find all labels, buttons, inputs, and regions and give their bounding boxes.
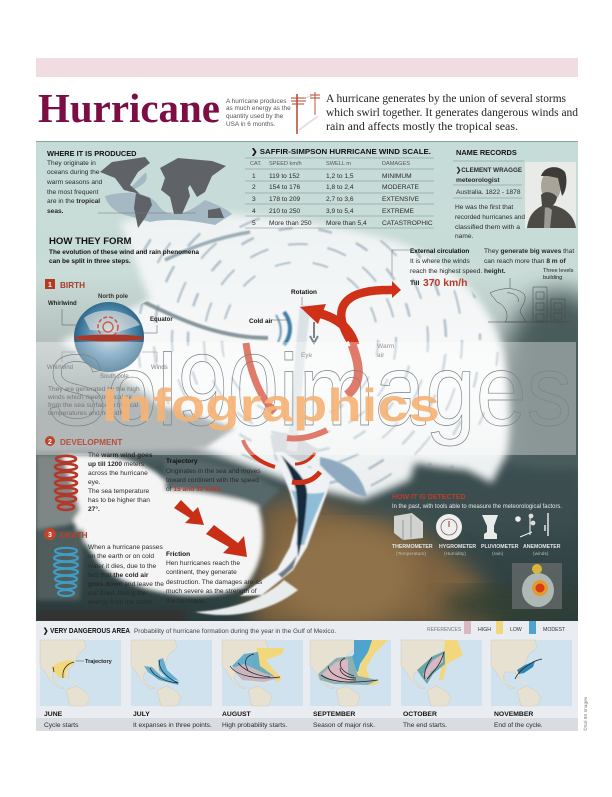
- instrument labels: (rain): [492, 551, 504, 557]
- how it is detected: In the past, with tools able to measure the meteorological factors.: [392, 503, 562, 510]
- month captions: It expanses in three points.: [133, 722, 212, 729]
- heading: where it is produced: WHERE IT IS PRODUCED: [47, 149, 137, 158]
- diagram labels: Warm: [377, 343, 395, 350]
- development text: [88, 452, 153, 513]
- name records: name.: [455, 233, 473, 240]
- step 2: development: 2: [48, 439, 52, 446]
- globe: [47, 294, 173, 380]
- friction text: Friction: [166, 551, 190, 558]
- diagram labels: Cold air: [249, 318, 273, 325]
- month captions: End of the cycle.: [494, 722, 543, 729]
- instrument labels: THERMOMETER: [392, 544, 433, 550]
- development text: up till 1200 meters: [88, 461, 145, 468]
- diagram labels: Rotation: [291, 289, 317, 296]
- big waves note: building: [543, 275, 562, 281]
- heading: where it is produced: They originate in: [47, 160, 96, 167]
- satellite image: [512, 563, 562, 609]
- side note: energy: USA in 6 months.: [226, 121, 276, 128]
- step 3: death: [44, 528, 88, 540]
- panel background: [36, 141, 578, 621]
- instrument labels: [392, 544, 561, 557]
- scale table: 1: [252, 173, 256, 180]
- map: July: [131, 640, 212, 706]
- trajectory text: Originates in the sea and moves: [166, 468, 261, 475]
- month captions: SEPTEMBER: [313, 711, 355, 718]
- trajectory text: Trajectory: [166, 458, 198, 465]
- scale table: CAT.: [250, 161, 262, 167]
- instrument labels: PLUVIOMETER: [481, 544, 519, 550]
- step 1: birth: 1: [48, 282, 52, 289]
- scale table: MODERATE: [382, 184, 419, 191]
- scale table: [245, 147, 434, 228]
- death text: on the earth or on cold: [88, 553, 154, 560]
- legend: MODEST: [543, 627, 566, 633]
- external circulation: Till: [410, 280, 420, 287]
- instrument labels: ANEMOMETER: [523, 544, 561, 550]
- red trajectory arrows: [174, 500, 247, 557]
- name records: Australia. 1822 - 1878: [456, 189, 521, 196]
- scale table: More than 250: [269, 220, 312, 227]
- birth description: [47, 386, 140, 417]
- trajectory text: toward continent with the speed: [166, 477, 259, 484]
- trajectory text: of 15 and 30 km/h.: [166, 486, 223, 493]
- development text: across the hurricane: [88, 470, 148, 477]
- name records: NAME RECORDS: [456, 148, 517, 157]
- how they form heading: can be split in three steps.: [49, 258, 131, 265]
- land and sea: [250, 500, 500, 630]
- scale table: 4: [252, 208, 256, 215]
- watermark band: [36, 342, 576, 455]
- main illustration panel: [36, 141, 612, 630]
- heading: where it is produced: [46, 149, 137, 215]
- eye column: [287, 305, 311, 452]
- name records: ❯CLEMENT WRAGGE: [456, 166, 523, 174]
- development text: has to be higher than: [88, 497, 150, 504]
- month captions: OCTOBER: [403, 711, 437, 718]
- map: November: [491, 640, 572, 706]
- side note: energy: A hurricane produces: [226, 98, 286, 105]
- step 2: development: [45, 436, 122, 447]
- heading: where it is produced: oceans during the: [47, 169, 100, 176]
- friction text: [166, 551, 263, 605]
- icon: red coil: [55, 456, 77, 510]
- instrument labels: HYGROMETER: [439, 544, 476, 550]
- intro text: A hurricane generates by the union of several storms: [326, 93, 567, 105]
- legend: [427, 621, 566, 634]
- birth description: temperatures and humidity.: [48, 410, 128, 417]
- birth description: They are generated by the high: [48, 386, 140, 393]
- hurricane cloud: [36, 210, 515, 506]
- big waves note: They generate big waves that: [484, 248, 574, 255]
- heading: where it is produced: are in the tropical: [47, 198, 100, 205]
- month captions: Season of major risk.: [313, 722, 375, 729]
- scale table: 2: [252, 184, 256, 191]
- section heading: ❯ VERY DANGEROUS AREA: [43, 627, 130, 635]
- name records: classified them with a: [455, 224, 520, 231]
- heading: where it is produced: warm seasons and: [46, 179, 103, 186]
- development text: The sea temperature: [88, 488, 150, 495]
- scale table: SWELL m: [326, 161, 351, 167]
- scale table: 210 to 250: [269, 208, 300, 215]
- scale table: SPEED km/h: [269, 161, 302, 167]
- scale table: EXTENSIVE: [382, 196, 420, 203]
- scale table: 3: [252, 196, 256, 203]
- friction text: much severe as the strength of: [166, 588, 257, 595]
- instrument labels: (winds): [533, 551, 549, 557]
- month captions: JULY: [133, 711, 150, 718]
- how it is detected: HOW IT IS DETECTED: [392, 494, 466, 501]
- how they form heading: HOW THEY FORM: [49, 236, 131, 247]
- scale table: 1,8 to 2,4: [326, 184, 354, 191]
- diagram labels: [249, 289, 395, 359]
- how they form heading: The evolution of these wind and rain phenomena: [49, 249, 199, 256]
- side note: energy: [226, 98, 291, 128]
- map: September: [310, 640, 391, 706]
- step 1: birth: [45, 279, 85, 290]
- world map: [98, 157, 232, 228]
- month captions: Cycle starts: [44, 722, 79, 729]
- death text: energy from the storm.: [88, 599, 154, 606]
- dark right side: [498, 274, 578, 456]
- map: June: Trajectory: [85, 659, 113, 665]
- external circulation: [392, 248, 482, 289]
- scale table: EXTREME: [382, 208, 414, 215]
- lower cloud skirts: [270, 433, 367, 497]
- step 2: development: DEVELOPMENT: [60, 438, 122, 447]
- death text: water it dies, due to the: [87, 563, 157, 570]
- death text: fact that the cold air: [88, 572, 149, 579]
- section heading: [43, 627, 336, 635]
- instrument icons: [394, 513, 548, 540]
- top pink band: [36, 58, 578, 77]
- month captions: The end starts.: [403, 722, 447, 729]
- icon: wave and buildings: [488, 278, 570, 322]
- friction text: Hen hurricanes reach the: [166, 560, 240, 567]
- title: Hurricane: [38, 85, 220, 131]
- scale table: 5: [252, 220, 256, 227]
- map: October: [401, 640, 482, 706]
- heading: where it is produced: seas.: [47, 208, 64, 215]
- tornado funnel: [195, 452, 330, 615]
- how it is detected: [392, 494, 562, 510]
- scale table: 3,9 to 5,4: [326, 208, 354, 215]
- step 1: birth: BIRTH: [60, 281, 85, 290]
- death text: When a hurricane passes: [88, 544, 163, 551]
- external circulation: 370 km/h: [423, 278, 467, 289]
- scale table: 1,2 to 1,5: [326, 173, 354, 180]
- scale table: 154 to 176: [269, 184, 300, 191]
- development text: eye.: [88, 479, 101, 486]
- copyright: ©Sol 90 Images: [582, 696, 589, 731]
- legend: LOW: [510, 627, 522, 633]
- intro text: [326, 93, 578, 133]
- name records: meteorologist: [456, 177, 500, 184]
- side note: energy: quantity used by the: [226, 113, 284, 120]
- instrument labels: (Humidity): [444, 551, 466, 557]
- globe: Equator: [150, 317, 173, 323]
- month captions: AUGUST: [222, 711, 252, 718]
- map: August: [222, 640, 303, 706]
- death text: [87, 544, 164, 606]
- scale table: 119 to 152: [269, 173, 300, 180]
- step 3: death: DEATH: [60, 531, 88, 540]
- map: June: [40, 640, 121, 706]
- heading: where it is produced: the most frequent: [47, 189, 98, 196]
- big waves note: can reach more than 8 m of: [484, 258, 567, 265]
- friction text: the hurricane.: [166, 598, 206, 605]
- scale table: 178 to 209: [269, 196, 300, 203]
- development text: 27°.: [88, 505, 100, 513]
- external circulation: It is where the winds: [410, 258, 470, 265]
- sea spray: [36, 454, 280, 622]
- legend: HIGH: [478, 627, 491, 633]
- instrument labels: (Temperature): [396, 551, 427, 557]
- globe: Winds: [151, 365, 168, 371]
- step 3: death: 3: [48, 532, 52, 539]
- scale table: MINIMUM: [382, 173, 412, 180]
- watermark infographics: Infographics: [102, 379, 440, 431]
- name records: [453, 148, 525, 240]
- side note: energy: as much energy as the: [226, 105, 291, 112]
- birth description: winds which meet tropical air: [47, 394, 133, 401]
- intro text: rain and affects mostly the tropical seas.: [326, 121, 518, 133]
- scale table: More than 5,4: [326, 220, 367, 227]
- scale table: ❯ SAFFIR-SIMPSON HURRICANE WIND SCALE.: [251, 147, 431, 157]
- death text: soil dried, losing the: [88, 590, 147, 597]
- globe: Whirlwind: [48, 301, 77, 307]
- how they form heading: [49, 236, 199, 265]
- big waves note: [484, 248, 574, 281]
- section heading: Probability of hurricane formation during the year in the Gulf of Mexico.: [134, 628, 336, 635]
- gray cloud base: [36, 397, 235, 452]
- scale table: CATASTROPHIC: [382, 220, 433, 227]
- intro text: which swirl together. It generates dangerous winds and: [326, 107, 578, 119]
- friction text: continent, they generate: [166, 569, 237, 576]
- diagram labels: Eye: [301, 352, 312, 359]
- red rotation arrows: [243, 281, 401, 483]
- down arrow near the eye: [310, 322, 318, 343]
- month captions: [44, 711, 543, 729]
- globe: South pole: [100, 374, 129, 380]
- icon: blue coil: [54, 548, 78, 596]
- month captions: High probability starts.: [222, 722, 287, 729]
- scale table: DAMAGES: [382, 161, 410, 167]
- very dangerous area panel: [36, 621, 578, 731]
- trajectory text: [166, 458, 261, 493]
- legend: REFERENCES: [427, 627, 462, 633]
- external circulation: External circulation: [410, 248, 469, 255]
- name records: He was the first that: [455, 204, 513, 211]
- name records: recorded hurricanes and: [455, 214, 525, 221]
- external circulation: reach the highest speed.: [410, 268, 482, 275]
- diagram labels: air: [377, 352, 385, 359]
- friction text: destruction. The damages are as: [166, 579, 263, 586]
- globe: Whirlwind: [47, 365, 73, 371]
- death text: goes down and leave the: [88, 581, 164, 588]
- icon: electricity poles: [291, 92, 320, 134]
- birth description: from the sea surface in tropical: [48, 402, 139, 409]
- month captions: JUNE: [44, 711, 63, 718]
- big waves note: Three levels: [543, 268, 574, 274]
- big waves note: height.: [484, 268, 506, 275]
- scale table: 2,7 to 3,6: [326, 196, 354, 203]
- globe: North pole: [98, 294, 129, 300]
- development text: The warm wind goes: [88, 452, 153, 459]
- portrait: [525, 162, 576, 228]
- month captions: NOVEMBER: [494, 711, 533, 718]
